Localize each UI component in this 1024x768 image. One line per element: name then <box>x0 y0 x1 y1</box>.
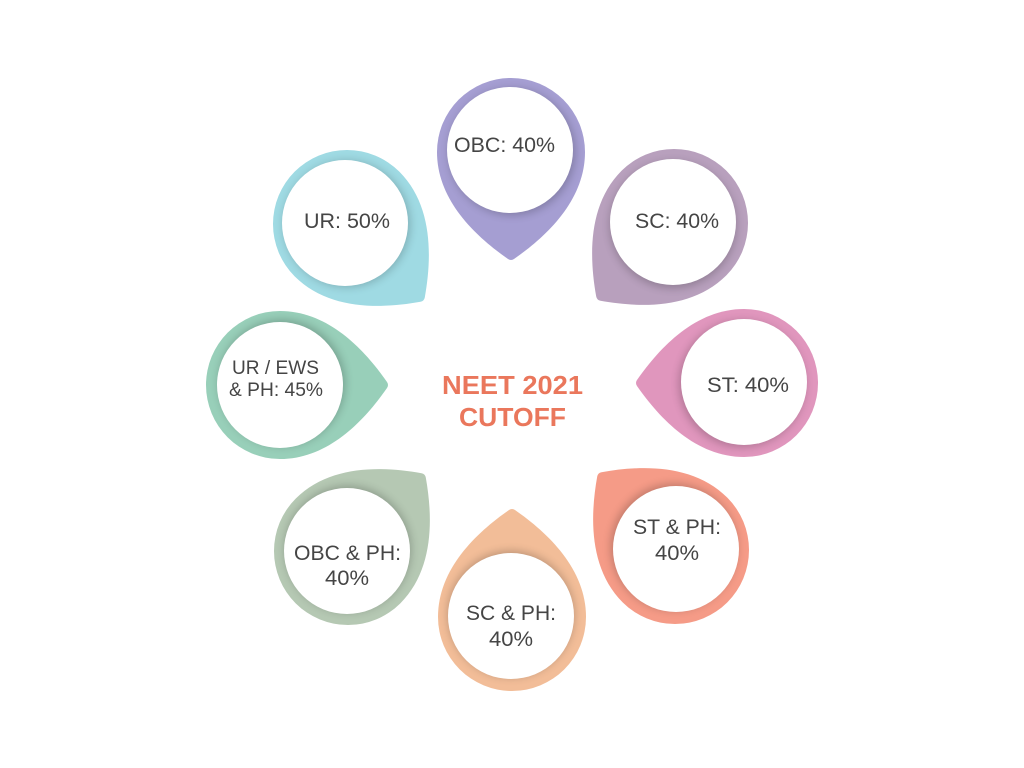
panel: UR 50%: UR: 50% <box>304 210 390 233</box>
panel: ST 40% <box>636 309 818 457</box>
panel: SC & PH 40%: 40% <box>489 628 533 651</box>
panel: OBC 40% <box>437 78 585 260</box>
panel: OBC 40%: OBC: 40% <box>454 134 555 157</box>
panel: ST & PH 40%: 40% <box>655 542 699 565</box>
panel: SC 40% <box>592 149 748 305</box>
title: CUTOFF <box>459 402 566 432</box>
panel: SC 40%: SC: 40% <box>635 210 719 233</box>
panel: UR 50% <box>273 150 429 306</box>
panel: UR / EWS & PH 45%: UR / EWS <box>232 358 319 379</box>
panel: UR / EWS & PH 45% <box>206 311 388 459</box>
title: NEET 2021 <box>442 370 583 400</box>
panel: SC & PH 40% <box>438 509 586 691</box>
panel: OBC & PH 40% <box>274 469 430 625</box>
panel: ST & PH 40%: ST & PH: <box>633 516 721 539</box>
title <box>442 370 583 432</box>
panel: OBC & PH 40%: 40% <box>325 567 369 590</box>
panel: OBC & PH 40%: OBC & PH: <box>294 542 401 565</box>
panel: SC & PH 40%: SC & PH: <box>466 602 556 625</box>
panel: ST & PH 40% <box>593 468 749 624</box>
panel: UR / EWS & PH 45%: & PH: 45% <box>229 380 323 401</box>
panel: ST 40%: ST: 40% <box>707 374 789 397</box>
